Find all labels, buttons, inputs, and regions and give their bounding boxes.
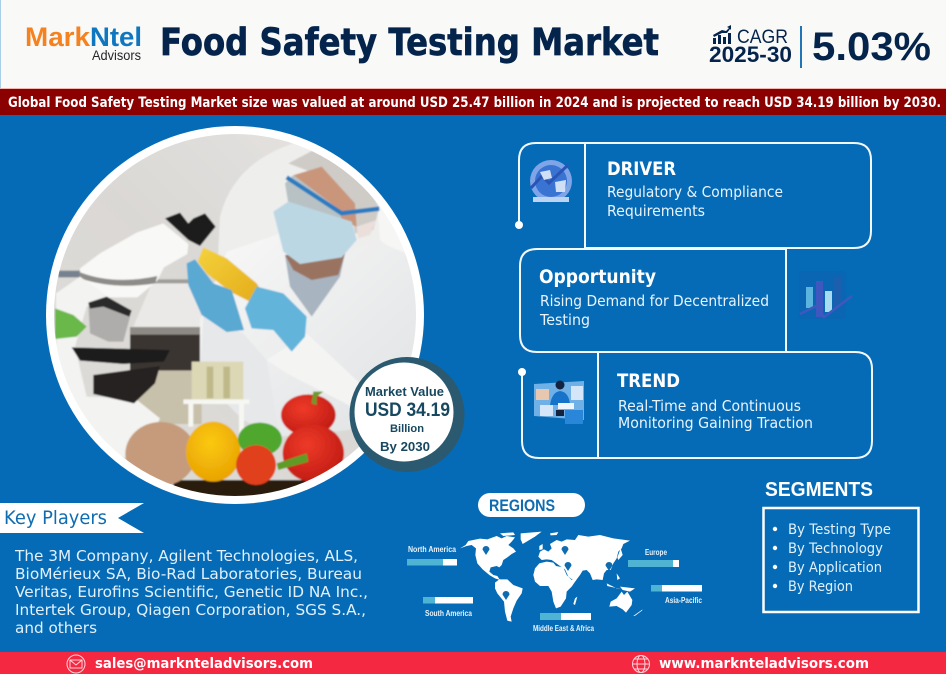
map pins — [482, 546, 612, 600]
panel: opportunity — [520, 249, 852, 352]
key players list: Intertek Group, Qiagen Corporation, SGS S.A., — [15, 601, 366, 619]
region: europe: Europe — [645, 548, 667, 557]
region: north america — [407, 545, 457, 566]
CAGR block: CAGR — [737, 27, 788, 48]
regions pill — [478, 493, 585, 517]
panel: driver: Requirements — [607, 202, 705, 220]
icon: globe — [632, 656, 650, 672]
lab coat — [198, 246, 413, 436]
badge: market value: Market Value — [365, 384, 444, 399]
region: south america: South America — [425, 609, 472, 618]
footer bar — [0, 652, 946, 674]
panel: trend — [518, 352, 872, 458]
region: asia-pacific: Asia-Pacific — [665, 596, 702, 605]
logo: MarkNtel Advisors: Ntel — [90, 22, 142, 52]
panel: driver: DRIVER — [607, 158, 676, 180]
logo: MarkNtel Advisors: Advisors — [92, 47, 141, 63]
regions pill: REGIONS — [489, 497, 555, 515]
footer email: sales@marknteladvisors.com — [95, 656, 313, 672]
segments list box: By Testing Type — [788, 522, 891, 538]
footer website: www.marknteladvisors.com — [659, 656, 869, 672]
panel: trend: TREND — [617, 370, 680, 392]
CAGR block: 5.03% — [812, 25, 931, 69]
key players list — [14, 547, 368, 637]
region: north america: North America — [408, 545, 456, 554]
segments heading: SEGMENTS — [765, 479, 873, 501]
region: south america — [423, 597, 473, 618]
segments list box — [764, 508, 918, 612]
icon: bar chart with trend line — [799, 271, 852, 319]
corn — [197, 246, 260, 302]
badge: market value — [350, 357, 464, 472]
icon: growth chart — [713, 25, 731, 44]
photo: scientist inspecting corn in circle — [46, 126, 424, 504]
header band — [0, 0, 946, 89]
key players list: and others — [15, 619, 97, 637]
shirt and neck — [285, 253, 345, 317]
vegetables — [172, 478, 308, 496]
segments list box: By Application — [788, 560, 882, 576]
microscope body — [80, 223, 188, 297]
key players ribbon — [0, 503, 144, 533]
key players list: BioMérieux SA, Bio-Rad Laboratories, Bureau — [15, 565, 362, 583]
panel: driver: Regulatory & Compliance — [607, 183, 783, 201]
key players ribbon: Key Players — [4, 507, 107, 529]
gloves — [187, 259, 244, 332]
segments list box: By Region — [788, 579, 853, 595]
logo: MarkNtel Advisors — [25, 22, 142, 63]
region: middle east and africa — [533, 613, 594, 633]
region: europe — [628, 548, 679, 567]
panel: driver — [515, 143, 871, 248]
icon: global regulation globe — [530, 160, 572, 202]
summary banner — [0, 89, 946, 115]
logo: MarkNtel Advisors: Mark — [25, 22, 91, 52]
head: hair net, face, mask, goggles — [288, 148, 379, 233]
CAGR block — [709, 25, 931, 69]
icon: analyst with dashboards — [534, 380, 584, 424]
key players list: The 3M Company, Agilent Technologies, ALS, — [14, 547, 358, 565]
title: Food Safety Testing Market — [160, 21, 659, 64]
CAGR block: 2025-30 — [709, 42, 792, 67]
badge: market value: By 2030 — [380, 439, 430, 454]
panel: opportunity: Rising Demand for Decentralized — [540, 292, 769, 310]
panel: opportunity: Opportunity — [539, 266, 657, 288]
badge: market value: USD 34.19 — [365, 400, 450, 421]
panel: trend: Monitoring Gaining Traction — [618, 414, 813, 432]
panel: trend: Real-Time and Continuous — [618, 397, 801, 415]
world map — [460, 532, 643, 622]
segments list box: By Technology — [788, 541, 883, 557]
icon: envelope — [67, 655, 85, 673]
lettuce — [55, 308, 87, 339]
test tubes — [192, 362, 243, 400]
panel: opportunity: Testing — [539, 311, 590, 329]
region: asia-pacific — [651, 585, 702, 605]
key players list: Veritas, Eurofins Scientific, Genetic ID NA Inc., — [15, 583, 368, 601]
region: middle east and africa: Middle East & Africa — [533, 624, 594, 633]
badge: market value: Billion — [390, 423, 424, 435]
